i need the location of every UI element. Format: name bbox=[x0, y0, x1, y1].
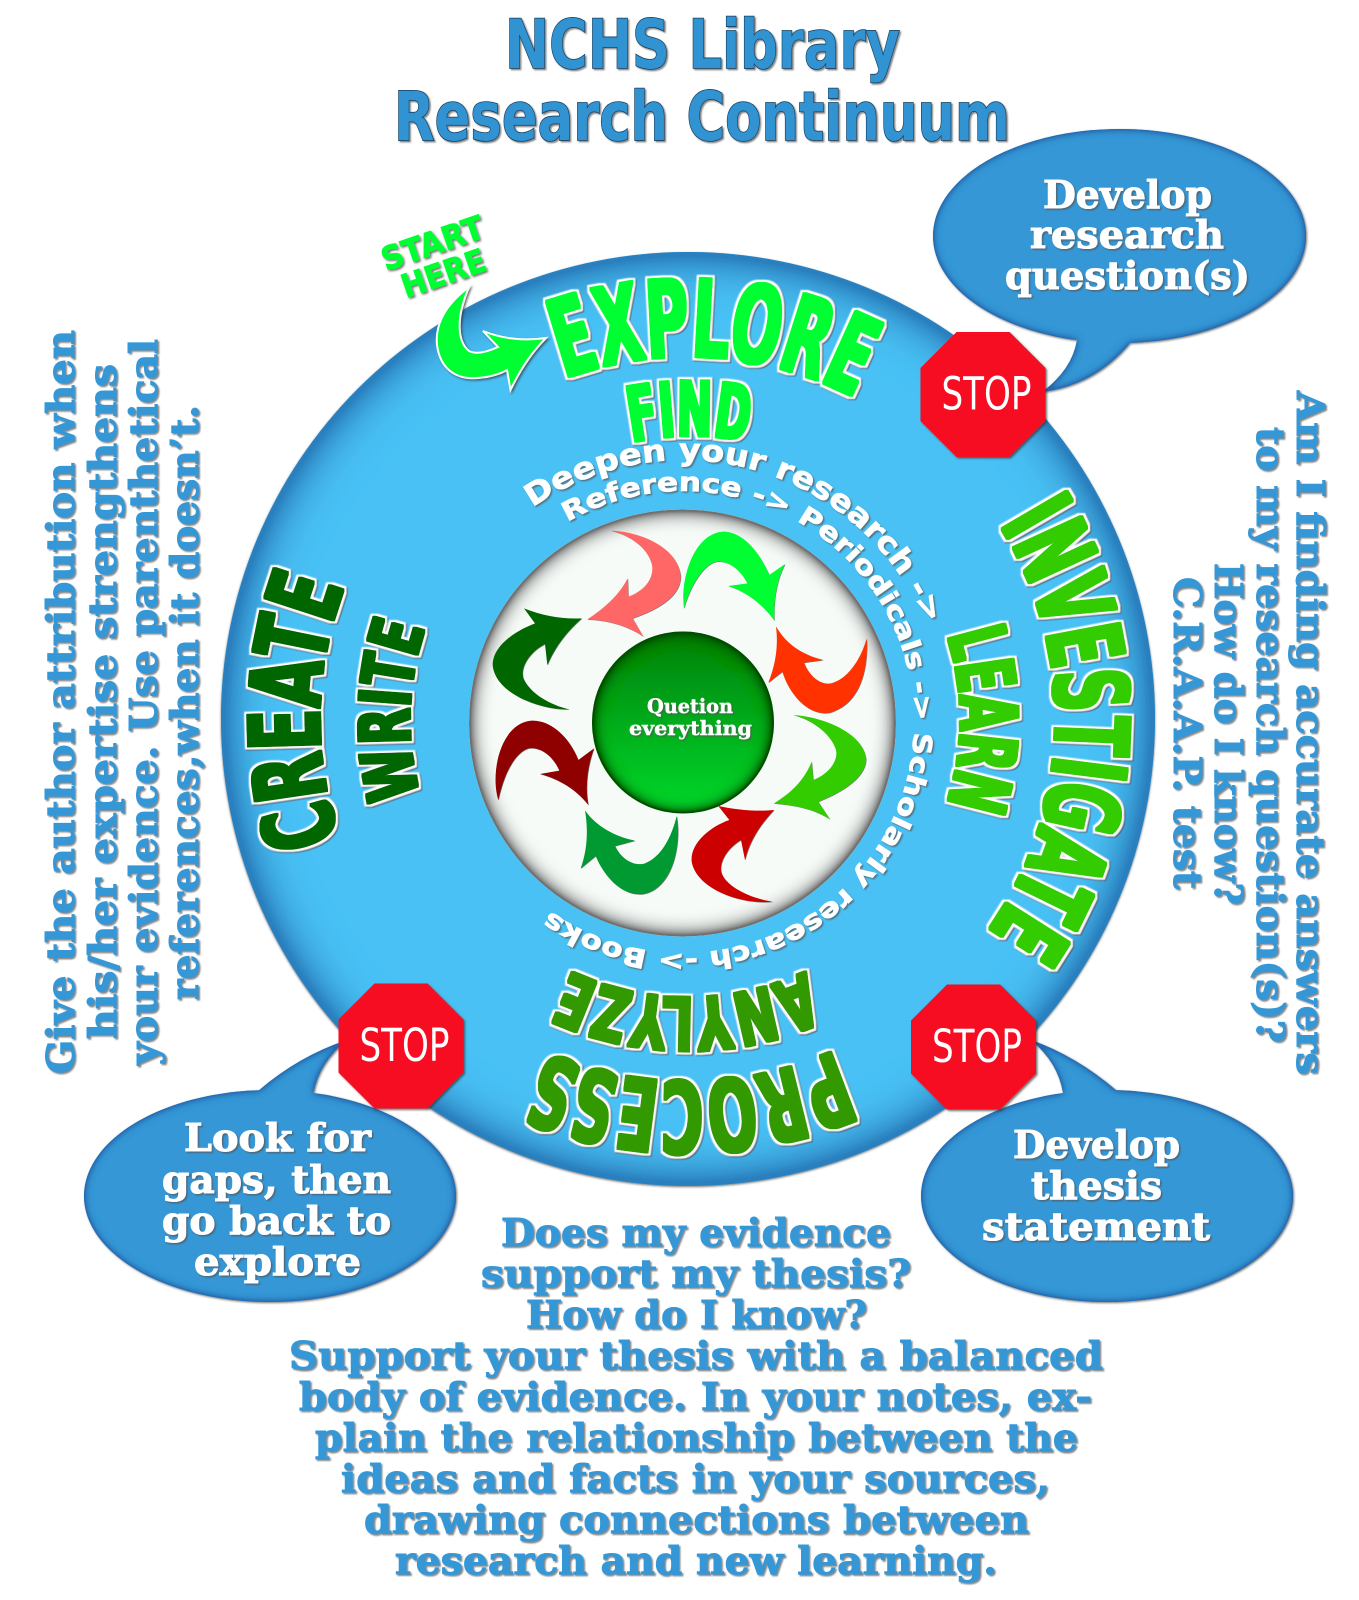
arrow: pink bbox=[587, 531, 681, 637]
icon: stop sign bottom right: STOP bbox=[932, 1020, 1022, 1073]
text: start here: HERE bbox=[396, 241, 491, 306]
heading: explore: EXPLORE bbox=[542, 274, 888, 401]
text: right side questions: How do I know? bbox=[1206, 563, 1251, 905]
heading: process: PROCESS bbox=[524, 1048, 862, 1160]
panel: main research circle bbox=[221, 252, 1155, 1186]
text: bottom guidance: support my thesis? bbox=[481, 1251, 911, 1296]
callout: develop thesis statement bbox=[921, 1040, 1293, 1302]
icon: stop sign bottom left: STOP bbox=[360, 1019, 450, 1072]
text: bottom guidance: Does my evidence bbox=[501, 1210, 891, 1255]
icon: stop sign top right bbox=[920, 332, 1046, 457]
text: left side advice: Give the author attribution when bbox=[38, 330, 83, 1074]
text: bottom guidance: ideas and facts in your sources, bbox=[341, 1456, 1050, 1501]
callout: develop research questions: Develop bbox=[1043, 172, 1212, 217]
heading: anylyze: ANYLYZE bbox=[548, 968, 818, 1057]
arrow: dark green bbox=[493, 608, 582, 709]
arrow: sea green bbox=[581, 811, 678, 894]
callout: look for gaps: go back to bbox=[162, 1198, 391, 1243]
callout: look for gaps bbox=[84, 1040, 456, 1302]
text: bottom guidance: Support your thesis with a balanced bbox=[289, 1333, 1103, 1378]
arrow: orange bbox=[768, 627, 867, 713]
text: bottom guidance bbox=[289, 1210, 1103, 1583]
text: bottom guidance: drawing connections between bbox=[364, 1497, 1029, 1542]
text: right side questions bbox=[1165, 390, 1333, 1075]
text: right side questions: Am I finding accurate answers bbox=[1288, 390, 1333, 1075]
text: start here: START bbox=[376, 208, 489, 279]
callout: develop thesis statement: thesis bbox=[1031, 1163, 1162, 1208]
text: right side questions: C.R.A.A.P. test bbox=[1165, 577, 1210, 889]
heading: find: FIND bbox=[622, 376, 755, 446]
arrow: red bbox=[692, 806, 774, 902]
text: deepen your research: Deepen your research -> bbox=[522, 443, 938, 620]
text: centre message: Quetion bbox=[647, 694, 733, 718]
text: left side advice: references,when it doesn’t. bbox=[162, 405, 207, 1000]
icon: stop sign bottom left bbox=[338, 984, 464, 1108]
text: centre message: everything bbox=[629, 716, 752, 740]
text: left side advice: your evidence. Use parenthetical bbox=[121, 339, 166, 1066]
chart: ring of eight curved arrows bbox=[493, 531, 867, 902]
heading: learn: LEARN bbox=[944, 620, 1024, 820]
text: left side advice: his/her expertise strengthens bbox=[80, 364, 125, 1039]
text: bottom guidance: body of evidence. In your notes, ex- bbox=[299, 1374, 1092, 1419]
callout: look for gaps: explore bbox=[194, 1239, 361, 1284]
callout: develop research questions bbox=[933, 129, 1306, 392]
text: centre message bbox=[629, 694, 752, 740]
text: right side questions: to my research question(s)? bbox=[1248, 427, 1293, 1043]
callout: develop thesis statement: statement bbox=[982, 1204, 1210, 1249]
title bbox=[394, 6, 1010, 157]
text: start here bbox=[376, 208, 491, 306]
callout: develop thesis statement: Develop bbox=[1013, 1122, 1180, 1167]
arrow: dark red bbox=[496, 721, 594, 805]
callout: develop research questions: question(s) bbox=[1005, 253, 1250, 298]
title: NCHS Library bbox=[505, 6, 900, 85]
heading: write: WRITE bbox=[354, 612, 430, 808]
heading: investigate: INVESTIGATE bbox=[986, 486, 1136, 974]
arrow: start here bbox=[437, 287, 546, 390]
text: bottom guidance: research and new learning. bbox=[395, 1538, 997, 1583]
text: bottom guidance: plain the relationship between the bbox=[315, 1415, 1078, 1460]
heading: create: CREATE bbox=[243, 564, 348, 854]
callout: develop research questions: research bbox=[1030, 212, 1224, 257]
text: left side advice bbox=[38, 330, 207, 1074]
panel: inner white circle bbox=[469, 510, 896, 936]
arrow: bright green bbox=[683, 532, 785, 621]
text: bottom guidance: How do I know? bbox=[526, 1292, 867, 1337]
arrow: green bbox=[774, 715, 866, 819]
callout: look for gaps: gaps, then bbox=[162, 1157, 391, 1202]
icon: stop sign top right: STOP bbox=[942, 368, 1032, 420]
callout: look for gaps: Look for bbox=[184, 1115, 372, 1160]
title: Research Continuum bbox=[394, 78, 1010, 157]
panel: centre green circle bbox=[592, 632, 774, 814]
icon: stop sign bottom right bbox=[911, 984, 1036, 1110]
text: source sequence: Reference -> Periodicals -> Scholarly research -> Books bbox=[544, 476, 936, 972]
